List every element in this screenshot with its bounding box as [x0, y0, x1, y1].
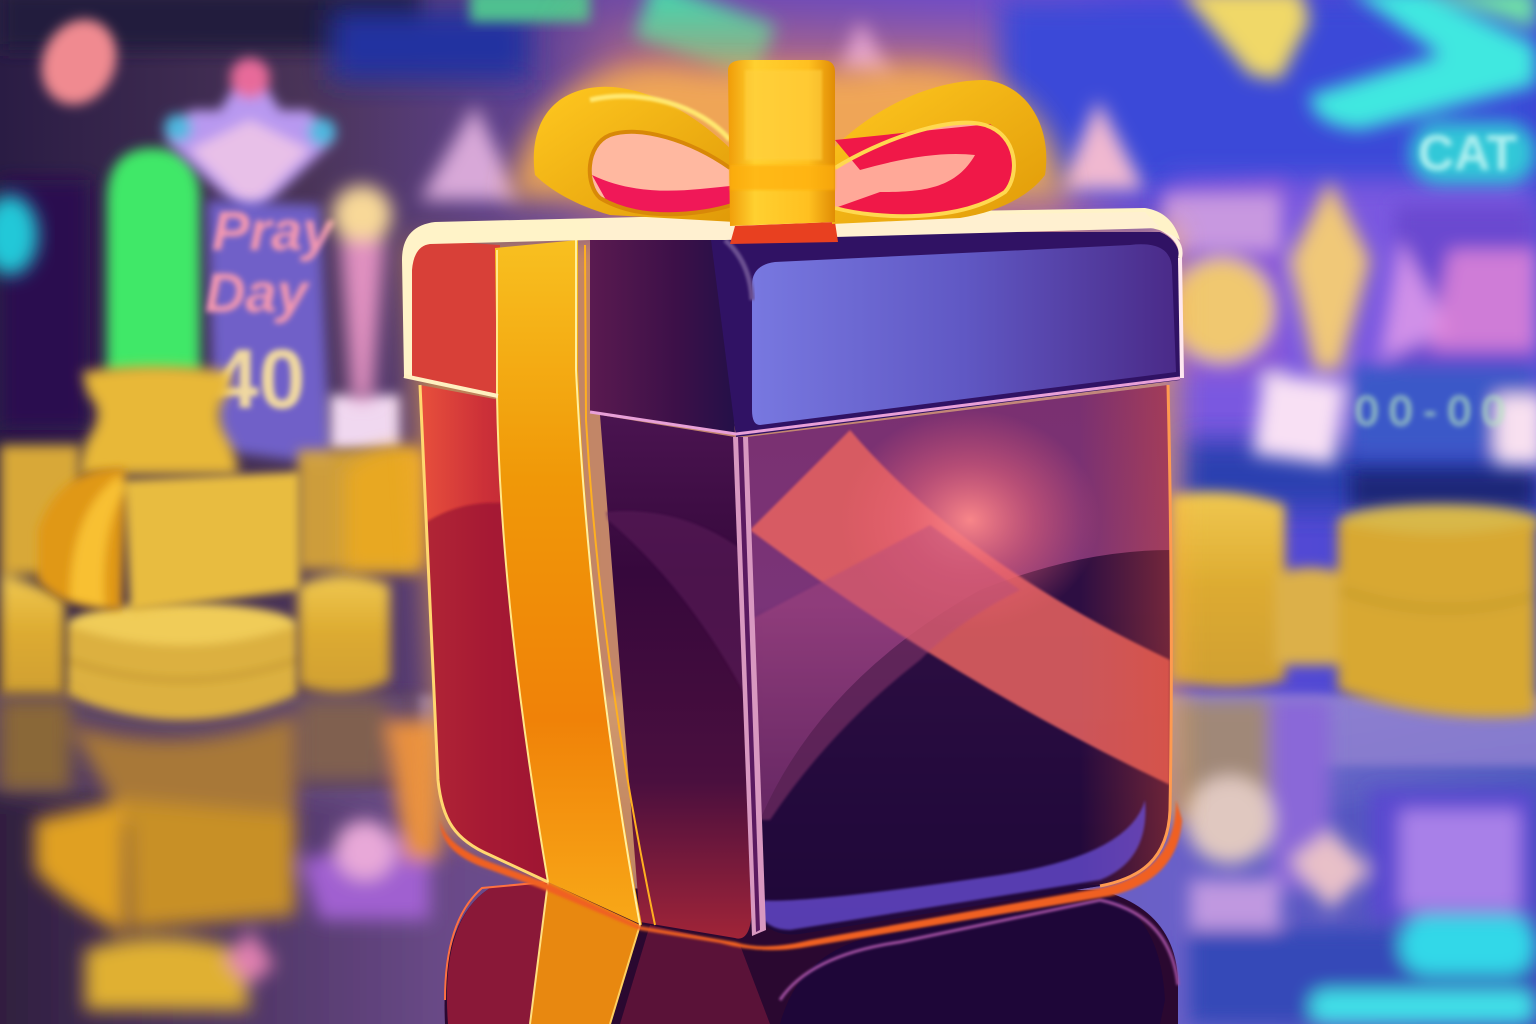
- left poster with blurred sign text: Day: [205, 261, 311, 324]
- lid left side: [408, 240, 500, 398]
- left loop: [534, 87, 735, 222]
- lid front panel: [590, 228, 1182, 437]
- right loop: [832, 80, 1046, 224]
- lid bottom left edge: [404, 376, 498, 396]
- green neon pill: [107, 148, 200, 375]
- left poster with blurred sign text: [205, 199, 400, 465]
- gold ribbon stack behind box: [345, 448, 425, 570]
- lid top white rim: [402, 208, 1180, 378]
- gold ribbon down the side: [495, 240, 655, 925]
- box outer glow: [405, 225, 1180, 945]
- reflection of right scene on floor: [1175, 700, 1536, 1024]
- left poster with blurred sign text: Pray: [212, 199, 336, 262]
- base rim: [440, 800, 1182, 950]
- right neon arrows and sign: [1180, 0, 1536, 184]
- gold coins left: [0, 445, 418, 695]
- left poster with blurred sign text: 40: [212, 332, 305, 426]
- blurred neon sign lettering: CAT: [1418, 125, 1517, 181]
- central small ornaments behind box: [332, 20, 1145, 400]
- gold coin stack front: [67, 603, 297, 720]
- lid middle dark face: [590, 236, 735, 435]
- cyan edge light: [0, 195, 38, 275]
- corner highlight edge: [733, 437, 766, 936]
- front face with light bands: [747, 385, 1175, 935]
- gold vase: [78, 366, 238, 475]
- gift box: [402, 208, 1182, 1024]
- right posters: [1160, 180, 1536, 465]
- gold gift box small: [38, 468, 300, 612]
- fan ornament above left poster: [164, 58, 336, 220]
- blurred digits on right panel: 00-00: [1355, 387, 1505, 434]
- center knot: [728, 60, 835, 226]
- left red face: [418, 384, 548, 884]
- reflection of gold props on floor: [0, 700, 440, 1010]
- gold coins right: [1170, 492, 1536, 717]
- floor reflection surface: [0, 690, 1536, 1024]
- gift bow: [534, 60, 1046, 226]
- orange halo behind bow: [510, 65, 1065, 200]
- pink blurred disc: [28, 7, 130, 117]
- reflection of box on floor: [445, 882, 1178, 1024]
- middle dark face: [600, 415, 752, 939]
